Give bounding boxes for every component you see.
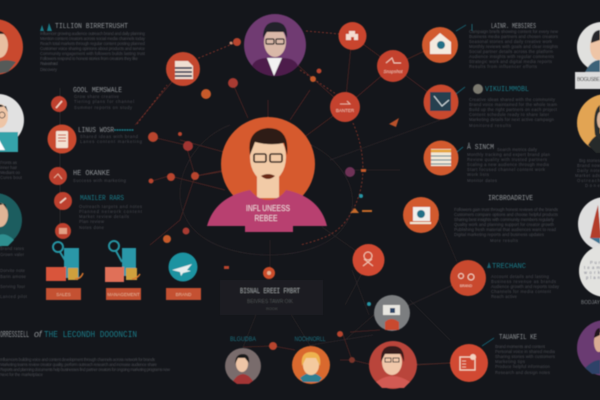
right text: block 6: Personal voice in shared media [495, 349, 556, 354]
right text: block 4: IRCBROADRIVE [488, 195, 533, 203]
network connections [135, 31, 468, 365]
item: goal message: Summer reports on study [74, 105, 133, 110]
left avatar 2 [0, 94, 24, 152]
item: linked work: Shared ideas with brand [80, 134, 139, 139]
item: goal message: Tiering plans for channel [74, 99, 134, 104]
label: left avatar: BLGUDBA [230, 337, 256, 343]
right avatar 4: work [584, 270, 600, 275]
right text: block 6: Sharing stories with customers [495, 354, 555, 359]
right avatar 4: plan [586, 275, 600, 280]
text block: left top: Discovery [40, 67, 58, 72]
right text: block 5: TRECHANC [492, 263, 526, 271]
orange circle [221, 117, 315, 211]
right text: block 3: Search metrics daily [497, 147, 538, 152]
heading: left top: TILLION BIRRETRUSHT [55, 23, 128, 31]
node: middle: BANTER [336, 108, 355, 113]
central figure [207, 117, 327, 232]
item: market rates: MANILER RARS [80, 195, 124, 203]
item: market rates: Outreach targets and notes [79, 204, 142, 209]
right text under avatar 2 [575, 158, 600, 188]
avatar: purple top [244, 14, 306, 76]
item: linked work [48, 124, 143, 154]
right text: block 1: Strategic work and digital media reports [469, 59, 552, 64]
node: browser [450, 344, 488, 382]
central figure: REBEE [254, 214, 278, 223]
left text beneath avatars: Mediant oo [0, 170, 21, 175]
icon: document [166, 52, 200, 86]
right text: block 1: LAINR. MEBSIRES [491, 23, 536, 31]
right text: block 2 [456, 84, 558, 128]
right text: block 1: Business media partners and chosen creators [469, 34, 558, 39]
icon group: tools two [105, 241, 140, 282]
text block: left top: Reviews shared [40, 61, 59, 66]
left text beneath avatars: Barin amose [0, 274, 27, 279]
right avatar 3 [578, 197, 600, 251]
right text: block 3: Monitor dates [467, 178, 497, 183]
avatar: brunette [225, 348, 261, 384]
right text: block 5: Business revenue as brands [491, 279, 556, 284]
section text: Marketing teams review creator quality, perform outreach research and increase audience share [0, 362, 158, 367]
text block: left top: Followers respond to honest stories from creators they like [40, 56, 139, 61]
section text: Influencers building voice and content development through channels across network for brands [0, 357, 155, 362]
left text beneath avatars: Grown valer [0, 252, 25, 257]
item: goal message: Grow share creative [74, 94, 120, 99]
right text: block 1: Audience insights with regular comments [469, 54, 554, 59]
icon group: tools one [46, 242, 83, 281]
node: tools [450, 260, 486, 296]
right text: block 3: Monthly tracking and expert brand plan [467, 152, 551, 157]
right text: block 1: Social partner details across the platform [469, 49, 554, 54]
right avatar 1 [575, 22, 600, 89]
item: market rates: Market review details [79, 214, 129, 219]
right text: block 4: Digital marketing reports and business updates [454, 232, 544, 237]
right text under avatar 2: Outreach [577, 178, 600, 183]
right avatar 4 [579, 245, 600, 297]
text block: left top: Reach total markets through regular content posting planned [40, 41, 146, 46]
right text: block 5 [487, 262, 560, 299]
right text: block 5: Account details and lasting [491, 274, 550, 279]
node: tools: BRAND [460, 284, 473, 288]
right avatar 4: team [584, 265, 600, 270]
right text: block 6: TAUANFIL KE [499, 334, 537, 342]
label: INFL UNEESS [246, 204, 290, 213]
right text: block 4: Quality work and planning support for creator growth [454, 222, 555, 227]
right text: block 6: Research and design notes [495, 370, 550, 375]
button: MANAGEMENT [107, 292, 140, 297]
right text: block 3 [457, 143, 551, 183]
right text: block 2: Creative ideas shared with the community [469, 97, 556, 102]
section title: of [34, 329, 43, 339]
right text: block 5: Reach active [491, 294, 518, 299]
left text beneath avatars: Lanced pilot [0, 294, 28, 299]
item: he okanake: Success with marketing [73, 178, 127, 183]
hair [249, 128, 287, 155]
item: he okanake: HE OKANKE [73, 170, 110, 178]
node: text badge [377, 50, 409, 82]
left avatar 3 [0, 193, 22, 247]
section text [0, 357, 171, 377]
node: text badge: Snapshot [383, 69, 403, 74]
left avatar 1 [0, 19, 23, 75]
right text: block 5: Channels for media content [491, 289, 552, 294]
item: market rates: Notes done [79, 225, 105, 230]
right text: block 1: Results from influencer efforts [469, 64, 537, 69]
right text: block 4: Publishing fresh material that audiences want to read [454, 227, 557, 232]
mouth [261, 174, 275, 179]
avatar: blonde [292, 346, 330, 384]
section text: Reports and planning documents help businesses find partner creators for ongoing marketing programs now [0, 367, 171, 372]
right avatar 5 [577, 320, 600, 376]
node dots [148, 38, 399, 363]
right avatar 2 [577, 94, 600, 153]
item: market rates: Plan review [79, 219, 105, 224]
right text under avatar 2: Market ads [575, 173, 600, 178]
right text under avatar 2: Done [585, 183, 600, 188]
pink shirt [207, 190, 327, 232]
button: BRAND [176, 292, 192, 297]
right text: block 4: More results [490, 238, 518, 243]
right text: block 2: Content schedule ready to share later [469, 112, 550, 117]
left timeline [48, 87, 143, 239]
right text: block 2: Build up the right partners on each project [469, 107, 558, 112]
button [46, 288, 81, 300]
right text: block 4: Sharing best insights with community members regularly [454, 217, 555, 222]
icon: plane [168, 252, 198, 282]
left text beneath avatars [0, 160, 28, 299]
button [106, 288, 141, 300]
node: top [338, 22, 366, 50]
item: linked work: LINUS WOSR [78, 127, 114, 135]
node: table [424, 140, 458, 176]
node: screen [424, 84, 458, 120]
right text: block 1: Seasonal stories and daily creative work [469, 39, 553, 44]
right text: block 3: Scaling a new audience through media [467, 162, 550, 167]
right text: block 6: Brand moments and content [495, 344, 546, 349]
center lower panel [220, 280, 323, 315]
right text: block 2: VIKUILMMOBL [485, 86, 529, 94]
node: house [422, 27, 458, 63]
right avatar 4: Pur [590, 260, 600, 265]
right text: block 6: Produce helpful information [495, 364, 551, 369]
center lower panel: BEIVRES TAWR OIK [247, 299, 294, 305]
left text beneath avatars: Serving four [0, 284, 26, 289]
right text under avatar 2: Daily note [577, 168, 600, 173]
right text: block 6: Marketing tips [495, 359, 525, 364]
text block: left top: Mention content creators across social media channels today [40, 36, 146, 41]
button: SALES [56, 292, 71, 297]
text block: left top: Community engagement with followers builds lasting trust [40, 51, 146, 56]
left text beneath avatars: Fronts as [0, 160, 17, 165]
right text: block 6 [482, 334, 556, 375]
right text: block 3: Review quality with trusted partners [467, 157, 547, 162]
right text: block 4: Customers compare options and choose helpful products [454, 212, 558, 217]
text block: left top: Influencer growing audience outreach brand and daily planning [40, 31, 146, 36]
node: middle [330, 92, 360, 122]
item: market rates: Planned network content [79, 209, 143, 214]
center lower panel: ROOK [266, 306, 278, 311]
right text: block 3: Â SINCM [467, 143, 494, 152]
item: linked work: Lanes content marketing [80, 139, 143, 144]
right text: block 1: Monthly reviews with goals and clear insights [469, 44, 558, 49]
right network circles [225, 22, 488, 389]
left text beneath avatars: Dorvite note [0, 268, 26, 273]
right text under avatar 2: Big stories [579, 158, 600, 163]
item: goal message [51, 87, 134, 112]
right text: block 4: Followers gain trust through honest reviews of the brands [454, 207, 558, 212]
right text: block 4 [454, 195, 558, 243]
right text: block 2: Marketing details for next active campaign [469, 117, 555, 122]
section title: THE LECONDH DOOONCIN [44, 330, 137, 340]
item: goal message: GOOL MEMSWALE [73, 87, 122, 95]
center lower panel: BISNAL EREEI FMBRT [240, 288, 300, 296]
right text under avatar 2: Brand now [577, 163, 600, 168]
button [166, 288, 201, 300]
avatar: glasses woman [369, 341, 417, 389]
left text beneath avatars: Brand rates [0, 246, 24, 251]
text block: left top [40, 31, 146, 72]
icon: red badge [55, 223, 71, 239]
item: market rates [54, 192, 143, 230]
right avatar 1: BOGUSBE [577, 77, 600, 83]
right text: block 3: Start focused channel content work [467, 167, 546, 172]
glasses [254, 154, 282, 162]
right text: block 2: Brand voice maintained for the whole team [469, 102, 558, 107]
left text beneath avatars: inner hair [0, 165, 18, 170]
right text: block 1: Campaign briefs showing content for every new [469, 29, 559, 34]
avatar: desk [374, 295, 410, 331]
section text: Next for the marketplace [0, 372, 44, 377]
right text: block 3: Work lists [467, 172, 489, 177]
right text: block 2: Monitored results [469, 123, 511, 128]
text block: left top: Customer voice sharing opinions about products and service [40, 46, 146, 51]
label: second avatar: NOCHNORLL [294, 337, 326, 343]
section title: ORRESSIELL [0, 330, 29, 340]
node: link [352, 244, 384, 276]
right text: block 5: Audience growth and reports today [491, 284, 560, 289]
right text: block 1 [456, 23, 559, 69]
neck and face [257, 170, 279, 198]
node: camera [403, 197, 439, 233]
left text beneath avatars: Cures bout [0, 175, 23, 180]
item: he okanake [49, 167, 127, 185]
section title [0, 329, 137, 340]
